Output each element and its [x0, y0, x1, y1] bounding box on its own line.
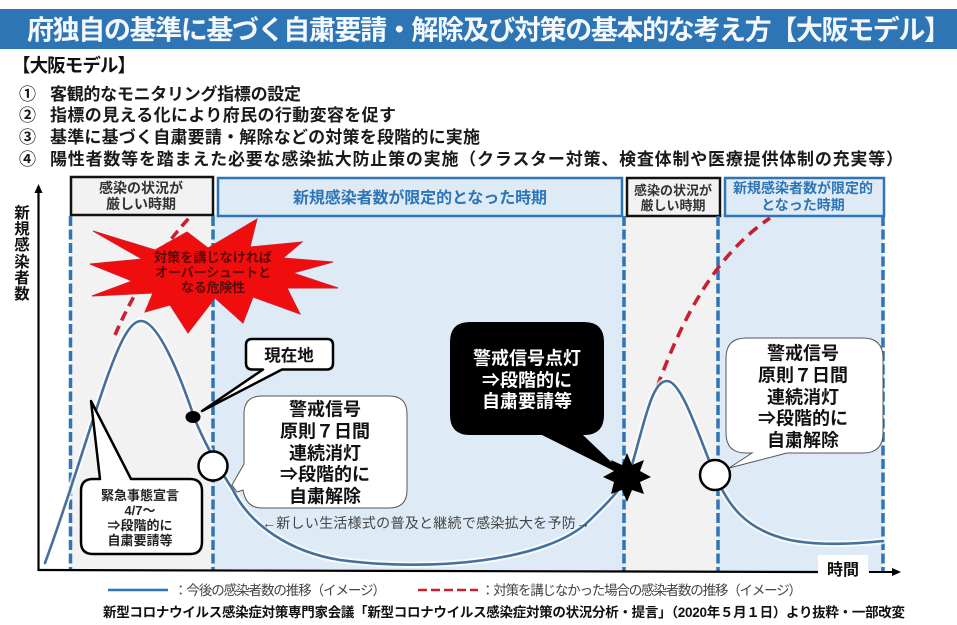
header: limited period 2: 新規感染者数が限定的 — [733, 180, 873, 196]
y axis label: 数 — [14, 285, 30, 303]
callout: warning light off, second: 警戒信号 — [767, 344, 839, 364]
numbered list of principles: ④ — [19, 150, 36, 169]
red dashed curve: no measures, second wave — [657, 218, 770, 387]
callout: warning light off, first: 原則７日間 — [280, 422, 370, 442]
x axis label and arrow — [818, 555, 901, 579]
y axis label: 感 — [14, 235, 30, 254]
x axis label and arrow: 時間 — [827, 561, 859, 579]
panel: limited period 1 background — [213, 214, 624, 571]
annotation: new lifestyle: ←新しい生活様式の普及と継続で感染拡大を予防→ — [262, 515, 590, 531]
red burst: overshoot warning: 対策を講じなければ — [154, 250, 272, 265]
header: severe period 2: 感染の状況が — [634, 183, 712, 198]
callout: warning light off, second: 連続消灯 — [767, 386, 839, 408]
panel: limited period 2 background — [718, 214, 883, 572]
header: severe period 1: 厳しい時期 — [106, 196, 176, 212]
period boundary dashed lines — [70, 216, 883, 571]
legend: projected curve: ：今後の感染者数の推移（イメージ） — [174, 582, 386, 598]
callout: warning light off, first: 警戒信号 — [289, 400, 361, 420]
y axis label: 規 — [14, 220, 30, 238]
header: severe period 1: 感染の状況が — [99, 180, 183, 196]
y axis label: 染 — [14, 253, 30, 271]
red dashed curve: no measures, first wave — [115, 217, 190, 335]
callout: warning light off, second: 原則７日間 — [758, 366, 848, 386]
white circle marker, second — [700, 460, 730, 490]
panel: severe period 1 background — [70, 214, 213, 570]
callout: state of emergency: 自粛要請等 — [107, 533, 173, 548]
black callout: warning light on: 警戒信号点灯 — [473, 348, 581, 368]
header: severe period 2: 厳しい時期 — [640, 198, 706, 213]
header: limited period 1: 新規感染者数が限定的となった時期 — [293, 188, 547, 207]
black callout: warning light on: ⇒段階的に — [482, 370, 572, 390]
legend: no-measures curve: ：対策を講じなかった場合の感染者数の推移（イメージ） — [481, 582, 802, 598]
infection curve — [45, 321, 883, 565]
numbered list of principles: ② — [19, 106, 36, 125]
subheading: Osaka model: 【大阪モデル】 — [12, 55, 136, 76]
black callout: warning light on — [450, 322, 628, 478]
numbered list of principles: 指標の見える化により府民の行動変容を促す — [50, 105, 396, 125]
header: severe period 2 — [627, 178, 720, 216]
callout: state of emergency: 緊急事態宣言 — [101, 488, 179, 503]
callout: warning light off, first — [232, 396, 407, 508]
header: severe period 1 — [71, 177, 213, 215]
red burst: overshoot warning: オーバーシュートと — [155, 265, 271, 280]
callout: warning light off, first: 自粛解除 — [289, 486, 361, 506]
current position marker and callout: 現在地 — [264, 346, 314, 365]
numbered list of principles: 客観的なモニタリング指標の設定 — [50, 84, 301, 104]
source note: 新型コロナウイルス感染症対策専門家会議「新型コロナウイルス感染症対策の状況分析・提言」（2020年５月１日）より抜粋・一部改変 — [103, 604, 906, 620]
callout: warning light off, second: ⇒段階的に — [758, 408, 848, 428]
white circle marker, first — [198, 452, 228, 480]
callout: state of emergency: 4/7～ — [124, 503, 156, 518]
y axis label: 者 — [14, 269, 30, 287]
axes — [34, 184, 818, 572]
callout: warning light off, second: 自粛解除 — [767, 430, 839, 450]
black star marker — [603, 453, 651, 502]
callout: warning light off, second — [726, 338, 883, 468]
header: limited period 1 — [218, 178, 622, 216]
numbered list of principles — [19, 84, 903, 169]
black callout: warning light on: 自粛要請等 — [482, 390, 572, 412]
callout: state of emergency: ⇒段階的に — [107, 518, 173, 533]
numbered list of principles: 陽性者数等を踏まえた必要な感染拡大防止策の実施（クラスター対策、検査体制や医療提供体制の充実等） — [50, 149, 903, 169]
panel: severe period 2 background — [624, 214, 718, 572]
callout: warning light off, first: 連続消灯 — [289, 442, 361, 464]
numbered list of principles: ③ — [19, 128, 36, 147]
callout: state of emergency — [81, 401, 202, 554]
numbered list of principles: 基準に基づく自粛要請・解除などの対策を段階的に実施 — [50, 127, 480, 147]
header: limited period 2 — [725, 178, 884, 216]
header: limited period 2: となった時期 — [761, 197, 845, 213]
y axis label: 新 — [14, 204, 30, 222]
current position marker and callout — [186, 339, 333, 423]
red burst: overshoot warning — [90, 219, 338, 333]
red burst: overshoot warning: なる危険性 — [181, 280, 245, 295]
title banner: 府独自の基準に基づく自粛要請・解除及び対策の基本的な考え方【大阪モデル】 — [27, 14, 951, 46]
callout: warning light off, first: ⇒段階的に — [280, 464, 370, 484]
y axis label — [14, 204, 30, 303]
numbered list of principles: ① — [19, 85, 36, 104]
